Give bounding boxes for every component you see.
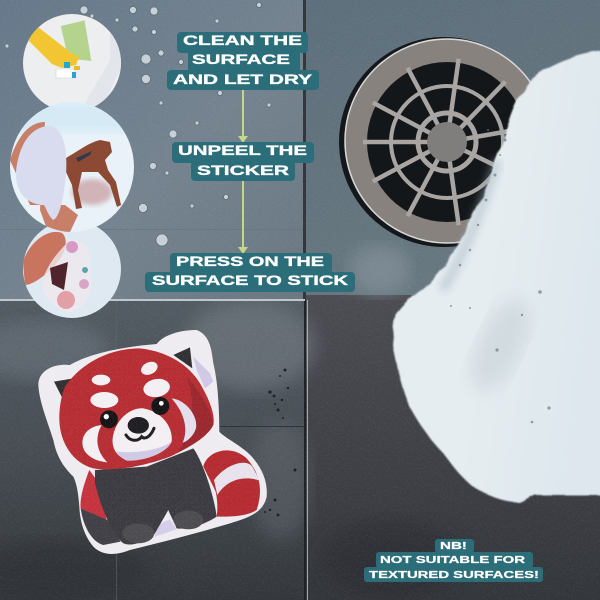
arrow: clean to unpeel [238,89,248,143]
label: clean the surface and let dry [167,32,319,90]
back leg [81,470,107,520]
label: textured surfaces warning: NB! [440,541,467,552]
tail [203,450,260,517]
label: clean the surface and let dry: AND LET DRY [173,71,313,87]
eyes and nose [100,397,169,440]
photo circle: cleaning the surface [23,14,125,112]
label: clean the surface and let dry: CLEAN THE [183,32,302,48]
soap foam [392,50,600,502]
label: press on the surface to stick: SURFACE TO STICK [152,272,348,288]
lavender shading behind ear [193,357,213,388]
paws [122,523,154,543]
water droplets [5,2,271,246]
ears [54,378,73,400]
label: textured surfaces warning: TEXTURED SURFACES! [369,570,539,581]
label: unpeel the sticker: STICKER [197,162,289,178]
label: textured surfaces warning: NOT SUITABLE FOR [380,555,526,566]
drain [339,37,549,247]
sticker white border [38,330,267,554]
label: clean the surface and let dry: SURFACE [192,51,290,67]
arrow: unpeel to press [238,180,248,254]
label: press on the surface to stick [145,253,355,292]
photo circle: third step pressing sticker [23,220,121,318]
label: unpeel the sticker [172,142,314,181]
label: press on the surface to stick: PRESS ON THE [176,253,324,269]
body [95,448,217,545]
label: unpeel the sticker: UNPEEL THE [178,142,307,158]
label: textured surfaces warning [364,539,543,582]
face markings [82,359,196,462]
dark specks on tile [264,368,296,516]
photo circle: unpeeling the sticker [10,102,134,232]
head [59,348,214,469]
lavender gap between feet [153,519,177,537]
sticker: red panda [38,330,267,554]
